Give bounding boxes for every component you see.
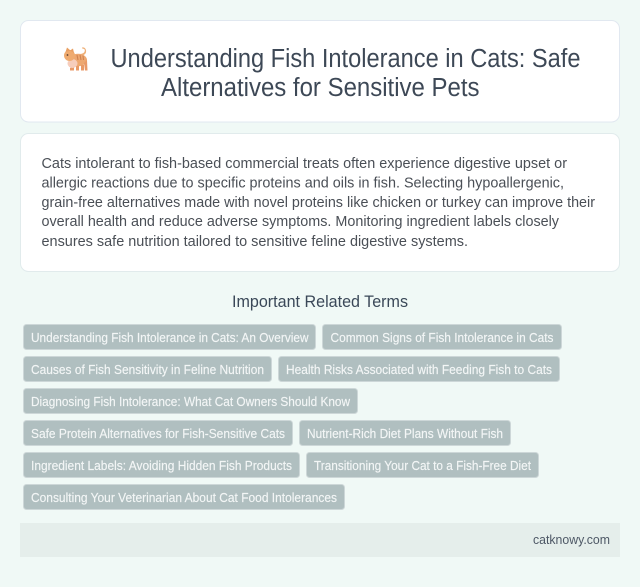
summary text: overall health and reduce adverse symptoms. Monitoring ingredient labels closely	[42, 213, 559, 230]
summary text: Cats intolerant to fish-based commercial treats often experience digestive upset or	[42, 155, 567, 172]
title text	[110, 45, 580, 102]
footer text: site name: catknowy.com	[533, 532, 610, 547]
tag: safe protein: Safe Protein Alternatives for Fish-Sensitive Cats	[31, 426, 285, 441]
summary text: ensures safe nutrition tailored to sensitive feline digestive systems.	[42, 233, 468, 250]
tag: health risks	[278, 356, 560, 382]
tag: ingredient labels: Ingredient Labels: Avoiding Hidden Fish Products	[31, 458, 292, 473]
tag: health risks: Health Risks Associated with Feeding Fish to Cats	[286, 362, 552, 377]
title text: Understanding Fish Intolerance in Cats: Safe	[110, 45, 580, 73]
icon: cat	[64, 47, 88, 70]
tag: causes	[24, 356, 272, 382]
summary text: grain-free alternatives made with novel proteins like chicken or turkey can improve their	[42, 194, 595, 211]
summary text: allergic reactions due to specific proteins and oils in fish. Selecting hypoallergenic,	[42, 174, 564, 192]
tag: causes: Causes of Fish Sensitivity in Feline Nutrition	[31, 362, 264, 377]
tag: transitioning	[306, 452, 538, 478]
summary text	[42, 155, 595, 250]
tag: overview: Understanding Fish Intolerance in Cats: An Overview	[31, 330, 309, 345]
tag: overview	[24, 324, 316, 350]
panel: summary	[20, 134, 620, 272]
tag: diet plans: Nutrient-Rich Diet Plans Without Fish	[307, 426, 503, 441]
tag: diagnosing	[24, 388, 358, 414]
tag: consulting	[24, 484, 344, 510]
tag: ingredient labels	[24, 452, 300, 478]
tag: safe protein	[24, 420, 292, 446]
footer	[20, 523, 620, 557]
tag: common signs: Common Signs of Fish Intolerance in Cats	[330, 330, 554, 345]
tag: diet plans	[300, 420, 510, 446]
tag: transitioning: Transitioning Your Cat to a Fish-Free Diet	[314, 458, 531, 473]
tag: diagnosing: Diagnosing Fish Intolerance: What Cat Owners Should Know	[31, 394, 351, 409]
title text: Alternatives for Sensitive Pets	[161, 74, 480, 102]
panel: related term tags	[24, 324, 562, 510]
heading: important related terms: Important Related Terms	[232, 293, 408, 311]
tag: common signs	[322, 324, 562, 350]
panel: title	[20, 20, 620, 122]
tag: consulting: Consulting Your Veterinarian About Cat Food Intolerances	[31, 490, 337, 505]
